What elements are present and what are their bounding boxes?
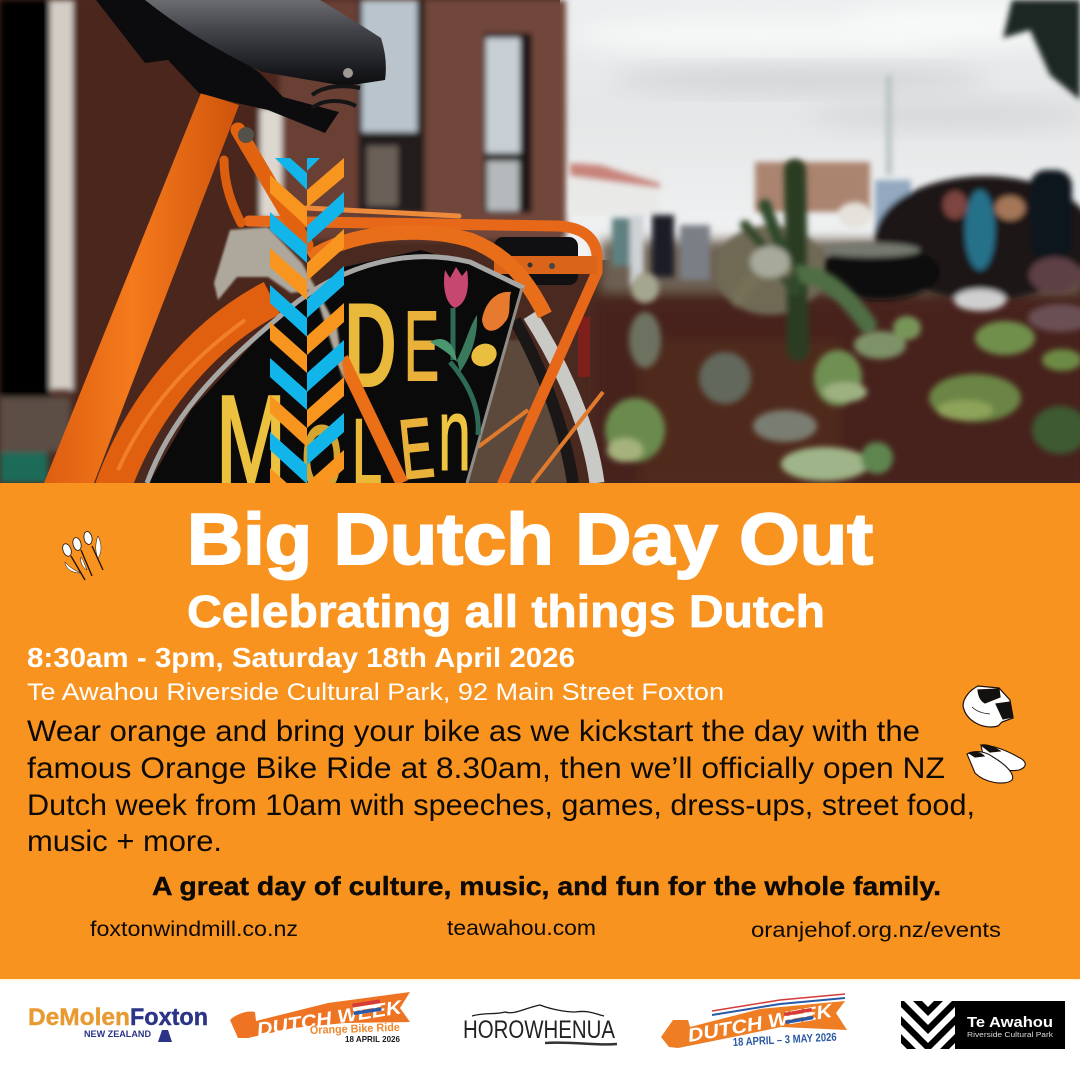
logo: Dutch Week dates: 18 APRIL – 3 MAY 2026	[733, 1032, 837, 1049]
logo: De Molen Foxton: DeMolen	[28, 1004, 130, 1031]
logo: Dutch Week dates	[661, 994, 847, 1049]
text: event description: Wear orange and bring your bike as we kickstart the day with the	[27, 715, 920, 748]
bicycle: mudflap with painted De Molen lettering	[147, 250, 524, 510]
logo: Te Awahou	[901, 1001, 1065, 1049]
photo background: brick building	[0, 0, 566, 483]
logo: De Molen Foxton: Foxton	[130, 1004, 208, 1031]
photo background: tree foliage	[1003, 0, 1080, 100]
bicycle: seat stays	[224, 127, 306, 245]
text: event description: famous Orange Bike Ride at 8.30am, then we’ll officially open NZ	[27, 752, 945, 785]
icon: white tulips	[61, 531, 103, 580]
text: event description: Dutch week from 10am with speeches, games, dress-ups, street food,	[27, 789, 975, 822]
text: event description	[27, 715, 975, 858]
logo: Te Awahou: Te Awahou	[967, 1014, 1053, 1031]
panel: sponsor logo strip	[0, 979, 1080, 1049]
photo background: ground plants	[605, 273, 1080, 481]
icon: clog pair side	[967, 745, 1025, 783]
text: location: Te Awahou Riverside Cultural Park, 92 Main Street Foxton	[27, 679, 724, 706]
panel: orange event information	[0, 483, 1080, 979]
bicycle: wheel tyre and spokes	[467, 315, 603, 483]
photo background: palm plant	[715, 170, 868, 350]
bicycle: mudflap with painted De Molen lettering: O	[302, 408, 342, 510]
photo background: mid ground haze	[600, 240, 1080, 295]
text: event description: music + more.	[27, 825, 222, 858]
bicycle: mudflap with painted De Molen lettering: E	[404, 291, 439, 401]
links: websites: oranjehof.org.nz/events	[751, 919, 1001, 942]
bicycle: saddle	[96, 0, 386, 133]
links: websites: foxtonwindmill.co.nz	[90, 918, 298, 941]
bicycle: mudflap with painted De Molen lettering: M	[216, 371, 286, 510]
photo background: crowd	[612, 170, 1080, 332]
bicycle: mudflap with painted De Molen lettering: L	[352, 401, 382, 503]
bicycle: mudflap with painted De Molen lettering: n	[438, 377, 471, 493]
bicycle: seat tube	[44, 93, 239, 483]
logo: Dutch Week Orange Bike Ride: DUTCH WEEK	[255, 997, 404, 1041]
photo background: soil bed	[595, 300, 1080, 490]
logo: Dutch Week Orange Bike Ride: Orange Bike Ride	[310, 1022, 400, 1037]
bicycle: rear carrier rack	[249, 208, 597, 483]
bicycle: mudflap with painted De Molen lettering: D	[344, 277, 397, 413]
bicycle: strut across mudflap	[342, 358, 402, 483]
logo: Horowhenua: HOROWHENUA	[463, 1016, 615, 1044]
logo: De Molen Foxton: NEW ZEALAND	[84, 1029, 151, 1040]
links: websites: teawahou.com	[447, 917, 596, 940]
text: date and time: 8:30am - 3pm, Saturday 18th April 2026	[27, 642, 575, 673]
logo: De Molen Foxton	[28, 1004, 208, 1042]
panel: photo of orange bicycle with De Molen mudflap	[0, 0, 1080, 510]
photo background: distant buildings	[570, 75, 892, 215]
flag stripes in Week	[784, 1008, 813, 1024]
tagline: A great day of culture, music, and fun for the whole family.	[152, 871, 941, 901]
orange chevron braid overlay	[270, 158, 344, 483]
flag stripes in Week	[352, 999, 382, 1015]
bicycle: mudflap with painted De Molen lettering: E	[395, 400, 438, 497]
logo: Dutch Week dates: DUTCH WEEK	[686, 1001, 835, 1047]
painted tulips	[430, 267, 511, 435]
chevron: right arms	[307, 158, 344, 502]
bicycle: mudguard	[112, 232, 545, 490]
subheading: Celebrating all things Dutch: Celebrating all things Dutch	[187, 586, 825, 637]
logo: Horowhenua	[463, 1005, 617, 1044]
photo background: sky	[560, 0, 1080, 260]
links: websites	[90, 917, 1001, 942]
logo: Te Awahou: Riverside Cultural Park	[967, 1030, 1053, 1039]
logo: Dutch Week Orange Bike Ride: 18 APRIL 2026	[345, 1034, 400, 1044]
icon: clog pair front	[963, 686, 1013, 727]
heading: Big Dutch Day Out: Big Dutch Day Out	[187, 500, 873, 580]
logo: Dutch Week Orange Bike Ride	[230, 992, 410, 1044]
chevron: left arms	[270, 175, 307, 483]
bicycle: mudguard bracket	[214, 227, 345, 385]
chevron: top blue tip	[275, 158, 307, 190]
